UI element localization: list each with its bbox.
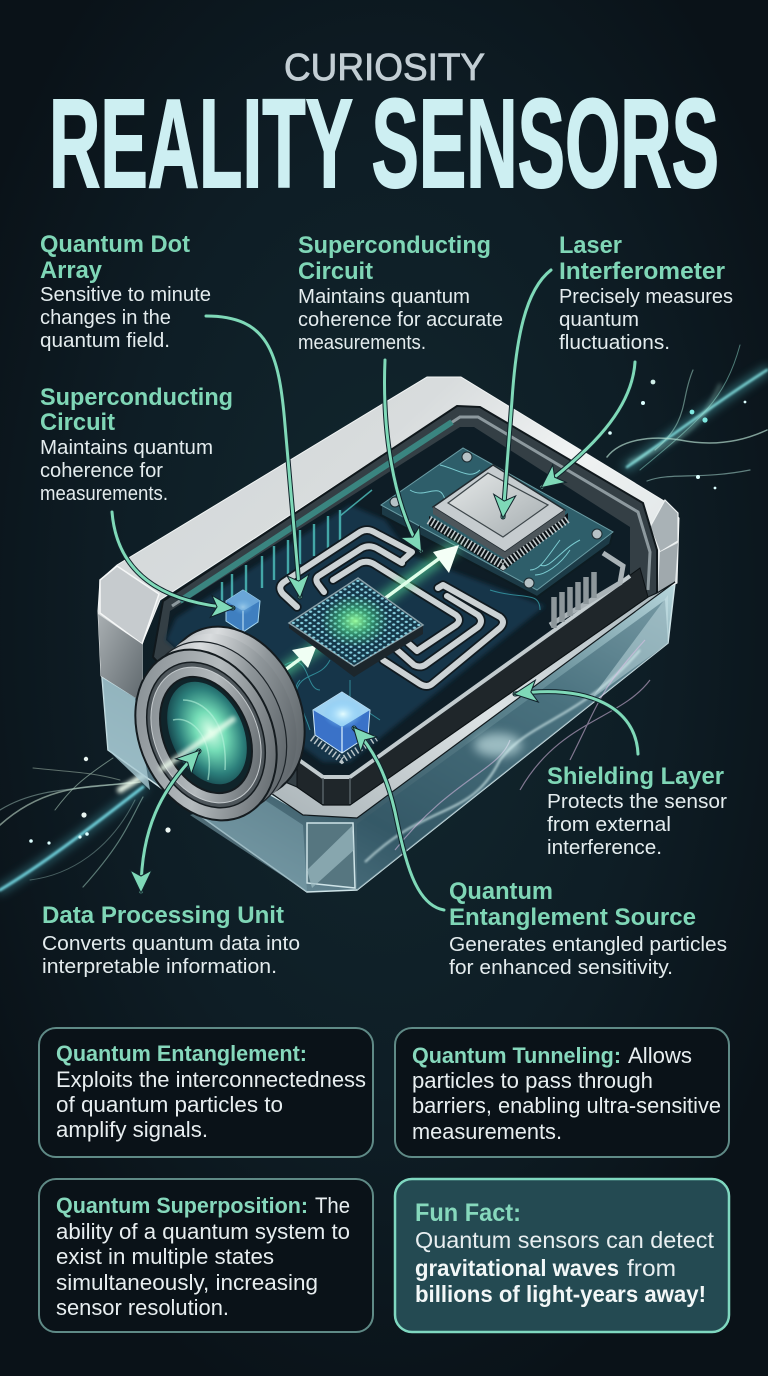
label: quantum dot array: Array (40, 257, 102, 284)
label: superconducting circuit top: Maintains quantum (298, 286, 470, 308)
label: superconducting circuit top: Superconducting (298, 232, 491, 259)
dark inner frame (153, 406, 657, 814)
teal lid accent (180, 422, 452, 601)
laser chip (433, 465, 565, 552)
panel: quantum superposition: The (315, 1193, 350, 1218)
silver fins (554, 572, 594, 628)
label: superconducting circuit top: Circuit (298, 258, 373, 285)
chip pins (429, 513, 568, 571)
label: data processing unit: Data Processing Unit (42, 902, 284, 929)
wall segments (323, 778, 350, 804)
label: superconducting circuit top: coherence for accurate (298, 309, 503, 331)
circuit trace accents (185, 590, 540, 730)
energy stream: right (607, 345, 767, 489)
panel: fun fact: Fun Fact: (415, 1199, 521, 1227)
panel: quantum tunneling (395, 1028, 729, 1157)
panel: fun fact: billions of light-years away! (415, 1281, 706, 1307)
label: quantum dot array: Sensitive to minute (40, 284, 211, 306)
small quantum cube (226, 590, 260, 632)
label: quantum dot array (40, 231, 211, 352)
panel: quantum entanglement: of quantum particles to (56, 1092, 283, 1117)
outer lid (98, 377, 679, 700)
label: data processing unit: interpretable information. (42, 956, 277, 978)
quantum dot array (289, 578, 423, 677)
panel: quantum superposition: exist in multiple states (56, 1244, 274, 1269)
title block (49, 47, 719, 214)
label: superconducting circuit top (298, 232, 503, 354)
device: quantum sensor housing (98, 377, 679, 892)
lower silver lip (262, 582, 675, 818)
eyebrow: CURIOSITY: CURIOSITY (284, 47, 485, 89)
laser interferometer board (381, 448, 613, 597)
black wall (297, 568, 648, 805)
left corner facets (98, 566, 159, 702)
arrow: laser interferometer chip (503, 270, 551, 517)
label: laser interferometer: quantum (559, 309, 639, 331)
label: shielding layer: Shielding Layer (547, 763, 724, 790)
right corner facets (650, 500, 678, 592)
label: superconducting circuit top: measurements. (298, 332, 426, 354)
quantum entanglement cube (312, 692, 376, 760)
panel: quantum superposition: ability of a quantum system to (56, 1219, 350, 1244)
panel: quantum tunneling: particles to pass through (412, 1068, 653, 1093)
panel: fun fact: gravitational waves (415, 1255, 619, 1281)
label: shielding layer: interference. (547, 837, 662, 859)
arrow: superconducting circuit top (385, 360, 421, 551)
panel: quantum entanglement: Quantum Entanglement: (56, 1041, 307, 1066)
label: superconducting circuit left (40, 384, 233, 505)
label: quantum entanglement source (449, 878, 727, 979)
panel: quantum tunneling: Allows (628, 1043, 692, 1068)
label: superconducting circuit left: Circuit (40, 409, 115, 436)
label: quantum dot array: quantum field. (40, 330, 170, 352)
energy stream: left (0, 735, 205, 890)
label: quantum entanglement source: for enhanced sensitivity. (449, 957, 673, 979)
label: superconducting circuit left: Superconducting (40, 384, 233, 411)
blue circuit board (166, 505, 545, 762)
panel: quantum superposition: sensor resolution. (56, 1295, 229, 1320)
label: quantum entanglement source: Quantum (449, 878, 553, 905)
panel: quantum entanglement: Exploits the interconnectedness (56, 1067, 366, 1092)
panel: quantum entanglement (39, 1028, 373, 1157)
callout arrows (112, 270, 638, 910)
glowing beam (281, 545, 459, 673)
panel: fun fact (395, 1179, 729, 1332)
label: quantum entanglement source: Generates entangled particles (449, 934, 727, 956)
label: shielding layer: from external (547, 814, 671, 836)
inner silver band (299, 576, 630, 777)
panel: quantum superposition (39, 1179, 373, 1332)
panel: quantum tunneling: measurements. (412, 1119, 562, 1144)
arrow: superconducting circuit left (112, 512, 233, 608)
label: quantum dot array: changes in the (40, 307, 171, 329)
panel: quantum entanglement: amplify signals. (56, 1117, 208, 1142)
label: data processing unit: Converts quantum data into (42, 933, 300, 955)
arrow: laser interferometer board (542, 362, 635, 487)
transparent glass base (102, 583, 675, 892)
label: quantum dot array: Quantum Dot (40, 231, 190, 258)
arrow: shielding layer (515, 692, 638, 754)
label: laser interferometer: Interferometer (559, 258, 725, 285)
panel: quantum tunneling: barriers, enabling ultra-sensitive (412, 1093, 721, 1118)
panel: quantum tunneling: Quantum Tunneling: (412, 1043, 621, 1068)
silver bracket (550, 553, 623, 625)
panel: fun fact: Quantum sensors can detect (415, 1227, 715, 1253)
superconducting traces (280, 530, 503, 686)
arrow: quantum entanglement source (354, 728, 444, 910)
label: shielding layer (547, 763, 727, 859)
label: superconducting circuit left: coherence for (40, 460, 163, 482)
label: shielding layer: Protects the sensor (547, 791, 727, 813)
label: data processing unit (42, 902, 300, 978)
label: laser interferometer: fluctuations. (559, 332, 670, 354)
label: laser interferometer: Laser (559, 232, 622, 259)
lens barrel (109, 603, 331, 844)
panel: quantum superposition: simultaneously, increasing (56, 1270, 318, 1295)
label: superconducting circuit left: Maintains quantum (40, 437, 213, 459)
panel: quantum superposition: Quantum Superposition: (56, 1193, 308, 1218)
label: laser interferometer (559, 232, 733, 354)
frame highlight band (172, 417, 650, 606)
comb of cyan lines (222, 490, 372, 606)
label: quantum entanglement source: Entanglement Source (449, 904, 696, 931)
label: superconducting circuit left: measurements. (40, 483, 168, 505)
label: laser interferometer: Precisely measures (559, 286, 733, 308)
interior circuit floor (166, 427, 630, 777)
panel: fun fact: from (627, 1255, 676, 1281)
arrow: data processing unit (141, 751, 199, 892)
arrow: quantum dot array (206, 316, 300, 597)
